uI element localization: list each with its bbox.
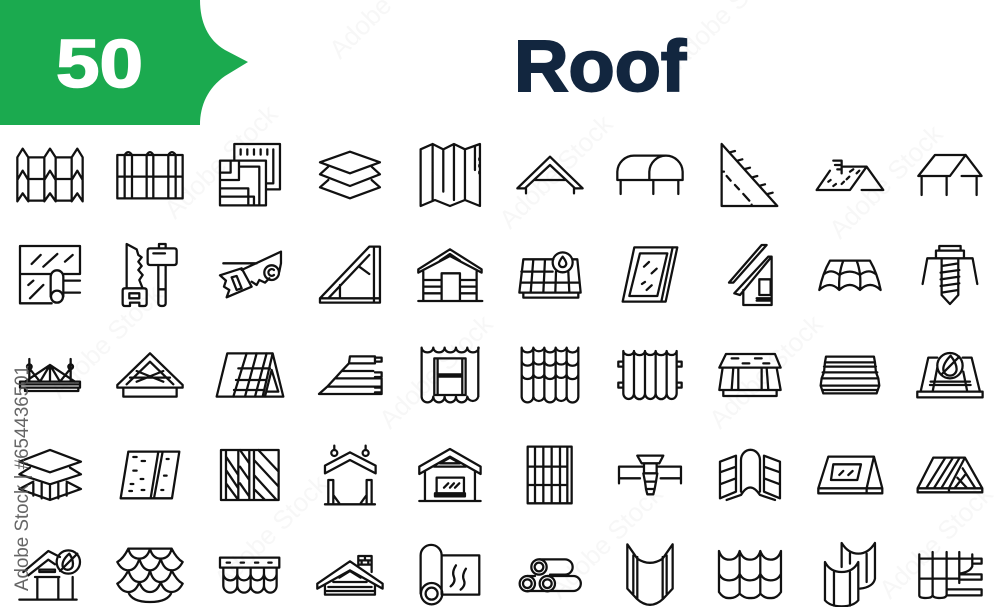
icon: wavy tile sheet (719, 551, 781, 598)
icon: no-fire house (19, 550, 80, 600)
icon: roofing screw (923, 246, 977, 304)
icon: truss with finials (20, 359, 80, 391)
watermark pattern: Adobe Stock (873, 478, 999, 604)
green banner with count: 50 (56, 26, 143, 102)
icon: wave tile (819, 261, 881, 290)
icon: folded sheet (421, 144, 480, 206)
icon: speckled board (121, 452, 179, 498)
icon: open shelter (918, 155, 982, 195)
icon: roof truss (320, 247, 380, 303)
icon: saw and mallet (123, 244, 177, 306)
watermark pattern: Adobe Stock (823, 118, 949, 244)
icon rows 3-4, left half (19, 348, 481, 504)
watermark pattern: Adobe Stock (703, 308, 829, 434)
icon rows 3-4, right half (522, 348, 983, 503)
icon: roof lift (325, 446, 376, 504)
icon: skylight (623, 247, 677, 302)
icon: roll with heat waves (421, 545, 479, 604)
icon rows 1-2, left half (17, 144, 482, 306)
watermark pattern: Adobe Stock (373, 308, 499, 434)
icon: stacked logs (520, 559, 581, 591)
watermark pattern: Adobe Stock (158, 98, 284, 224)
icon: rotating saw (220, 252, 281, 297)
icon: scallop tiles with window (422, 348, 479, 402)
icon: shingle strip (220, 558, 279, 593)
watermark pattern: Adobe Stock (493, 108, 619, 234)
icon: solar roof with drop (519, 252, 581, 298)
icon: fish-scale shingles (117, 549, 183, 602)
icon: stacked sheets (821, 357, 879, 393)
green banner with count (0, 0, 248, 125)
icon: arched canopy (617, 156, 683, 194)
icon: pointed tiles (17, 149, 83, 201)
icon: tile with strips (919, 552, 982, 598)
icon: log cabin (418, 249, 482, 301)
icon: no-water roof (917, 353, 983, 397)
icon: insulation layers (19, 450, 81, 500)
icon: curved ridge (627, 544, 673, 605)
icon rows 1-2, right half (517, 144, 982, 305)
icon: corrugated panel (618, 351, 682, 399)
icon: gable truss (117, 353, 183, 397)
watermark pattern: Adobe Stock (43, 278, 169, 404)
watermark pattern: Adobe Stock (543, 478, 669, 604)
icon: hatched panel (221, 450, 279, 500)
icon: plank roof (918, 458, 982, 492)
icon: ridge tile (720, 450, 780, 500)
icon: overlapping gutters (825, 543, 875, 606)
icon: A-frame tiled (217, 353, 283, 397)
icon: stacked boards (319, 356, 382, 394)
icon: skylight roof (818, 457, 882, 493)
icon: underlayment sheets (220, 144, 280, 205)
icon: roof section (729, 245, 772, 305)
icon row 5, left half (19, 545, 479, 604)
icon row 5, right half (520, 543, 982, 606)
icon: ridged tiles (117, 152, 183, 198)
icon: roofing roll (20, 246, 80, 303)
icon: roof with chimney (817, 161, 883, 190)
icon: truss gable (517, 157, 583, 193)
title: Roof (514, 27, 687, 107)
icon: house with chimney (317, 556, 383, 595)
icon: scale tiles (522, 348, 578, 402)
stock id vertical text: Adobe Stock | #654436501 (12, 365, 33, 591)
watermark pattern: Adobe Stock (208, 468, 334, 594)
icon: hip roof (719, 354, 781, 396)
icon: tile grid (528, 447, 572, 503)
icon: roof screw (619, 456, 681, 494)
icon: layers (320, 152, 380, 198)
icon: garage house (419, 449, 481, 501)
icon: triangular panel (722, 144, 777, 206)
